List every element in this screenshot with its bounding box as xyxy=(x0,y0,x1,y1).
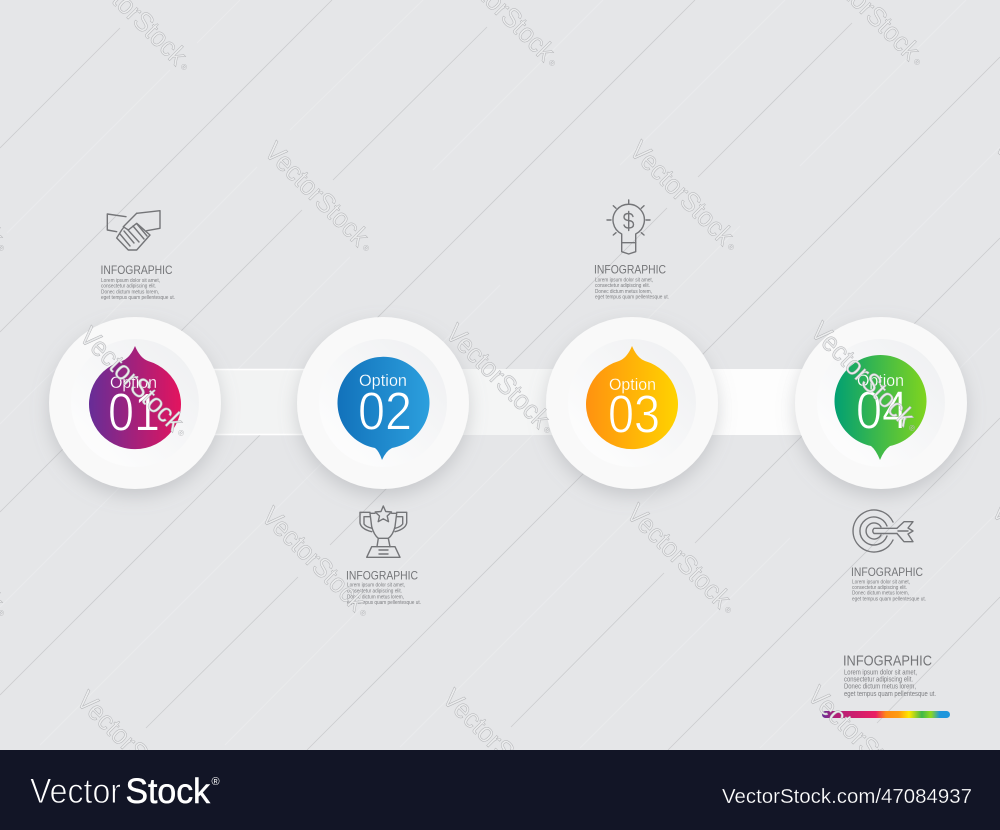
option 4 drop badge xyxy=(835,355,926,460)
summary text block: eget tempus quam pellentesque ut. xyxy=(844,691,936,698)
text block: step 3: consectetur adipiscing elit. xyxy=(595,283,650,289)
watermarks: VectorStock xyxy=(437,683,553,799)
option 3 node xyxy=(546,317,718,489)
footer logo: Vector xyxy=(30,772,121,811)
watermarks: VectorStock xyxy=(440,318,556,434)
watermarks: ® xyxy=(179,62,189,72)
text block: step 1: eget tempus quam pellentesque ut. xyxy=(101,295,175,301)
footer logo xyxy=(30,772,220,811)
footer image id: VectorStock.com/47084937 xyxy=(722,786,972,808)
watermarks: ® xyxy=(907,423,917,433)
summary text block: consectetur adipiscing elit. xyxy=(844,677,913,684)
option 1 node: Option xyxy=(110,374,157,392)
text block: step 2: eget tempus quam pellentesque ut. xyxy=(347,600,421,606)
option 3 drop badge xyxy=(586,346,678,449)
option 1 drop badge xyxy=(89,346,181,449)
summary text block xyxy=(843,653,936,698)
icon: target with arrow xyxy=(853,510,913,552)
watermarks: ® xyxy=(358,608,368,618)
text block: step 3 xyxy=(594,262,669,300)
text block: step 2: consectetur adipiscing elit. xyxy=(347,588,402,594)
text block: step 2: Lorem ipsum dolor sit amet, xyxy=(347,583,405,589)
text block: step 4: consectetur adipiscing elit. xyxy=(852,585,907,591)
summary text block: Donec dictum metus lorem, xyxy=(844,684,916,691)
text block: step 4: Lorem ipsum dolor sit amet, xyxy=(852,579,910,585)
watermarks: ® xyxy=(542,425,552,435)
text block: step 4: INFOGRAPHIC xyxy=(851,565,923,579)
option 1 node xyxy=(49,317,221,489)
option 4 node: 04 xyxy=(856,380,908,440)
text block: step 4: Donec dictum metus lorem, xyxy=(852,591,909,597)
watermarks: ® xyxy=(726,242,736,252)
watermarks: VectorStock xyxy=(74,321,190,437)
option 2 node: 02 xyxy=(358,382,412,442)
icon: trophy xyxy=(360,506,407,557)
text block: step 2: INFOGRAPHIC xyxy=(346,568,418,582)
watermarks: ® xyxy=(176,428,186,438)
connector band xyxy=(200,369,820,435)
text block: step 1: Donec dictum metus lorem, xyxy=(101,289,159,295)
text block: step 3: eget tempus quam pellentesque ut. xyxy=(595,294,669,300)
watermarks: VectorStock xyxy=(802,680,918,796)
text block: step 1 xyxy=(100,263,175,301)
option 2 drop badge xyxy=(337,357,430,460)
text block: step 3: Lorem ipsum dolor sit amet, xyxy=(595,278,653,284)
text block: step 4: eget tempus quam pellentesque ut. xyxy=(852,596,926,602)
text block: step 1: Lorem ipsum dolor sit amet, xyxy=(101,278,160,284)
option 3 node: Option xyxy=(609,376,656,394)
icon: handshake xyxy=(107,211,160,250)
text block: step 3: Donec dictum metus lorem, xyxy=(595,289,652,295)
option 2 node xyxy=(297,317,469,489)
footer logo: ® xyxy=(212,776,220,788)
option 4 node: Option xyxy=(857,372,904,390)
option 3 node: 03 xyxy=(608,384,660,444)
summary text block: INFOGRAPHIC xyxy=(843,653,932,670)
text block: step 1: consectetur adipiscing elit. xyxy=(101,284,156,290)
option 4 node xyxy=(795,317,967,489)
text block: step 1: INFOGRAPHIC xyxy=(100,263,173,277)
watermarks: VectorStock xyxy=(256,501,372,617)
watermarks: VectorStock xyxy=(624,135,740,251)
text block: step 2 xyxy=(346,568,421,606)
text block: step 2: Donec dictum metus lorem, xyxy=(347,594,404,600)
footer bar xyxy=(0,750,1000,830)
text block: step 4 xyxy=(851,565,926,602)
option 1 node: 01 xyxy=(108,382,160,442)
watermarks: ® xyxy=(912,57,922,67)
text block: step 3: INFOGRAPHIC xyxy=(594,262,666,276)
watermarks: VectorStock xyxy=(805,316,921,432)
watermarks: VectorStock xyxy=(621,498,737,614)
rainbow bar xyxy=(822,711,950,718)
watermarks: VectorStock xyxy=(71,685,187,801)
option 2 node: Option xyxy=(359,372,407,390)
summary text block: Lorem ipsum dolor sit amet, xyxy=(844,670,917,676)
watermarks: ® xyxy=(547,58,557,68)
footer logo: Stock xyxy=(126,772,210,811)
watermarks: VectorStock xyxy=(259,136,375,252)
watermarks: ® xyxy=(723,605,733,615)
watermarks: ® xyxy=(361,243,371,253)
icon: light bulb with dollar xyxy=(607,200,650,254)
